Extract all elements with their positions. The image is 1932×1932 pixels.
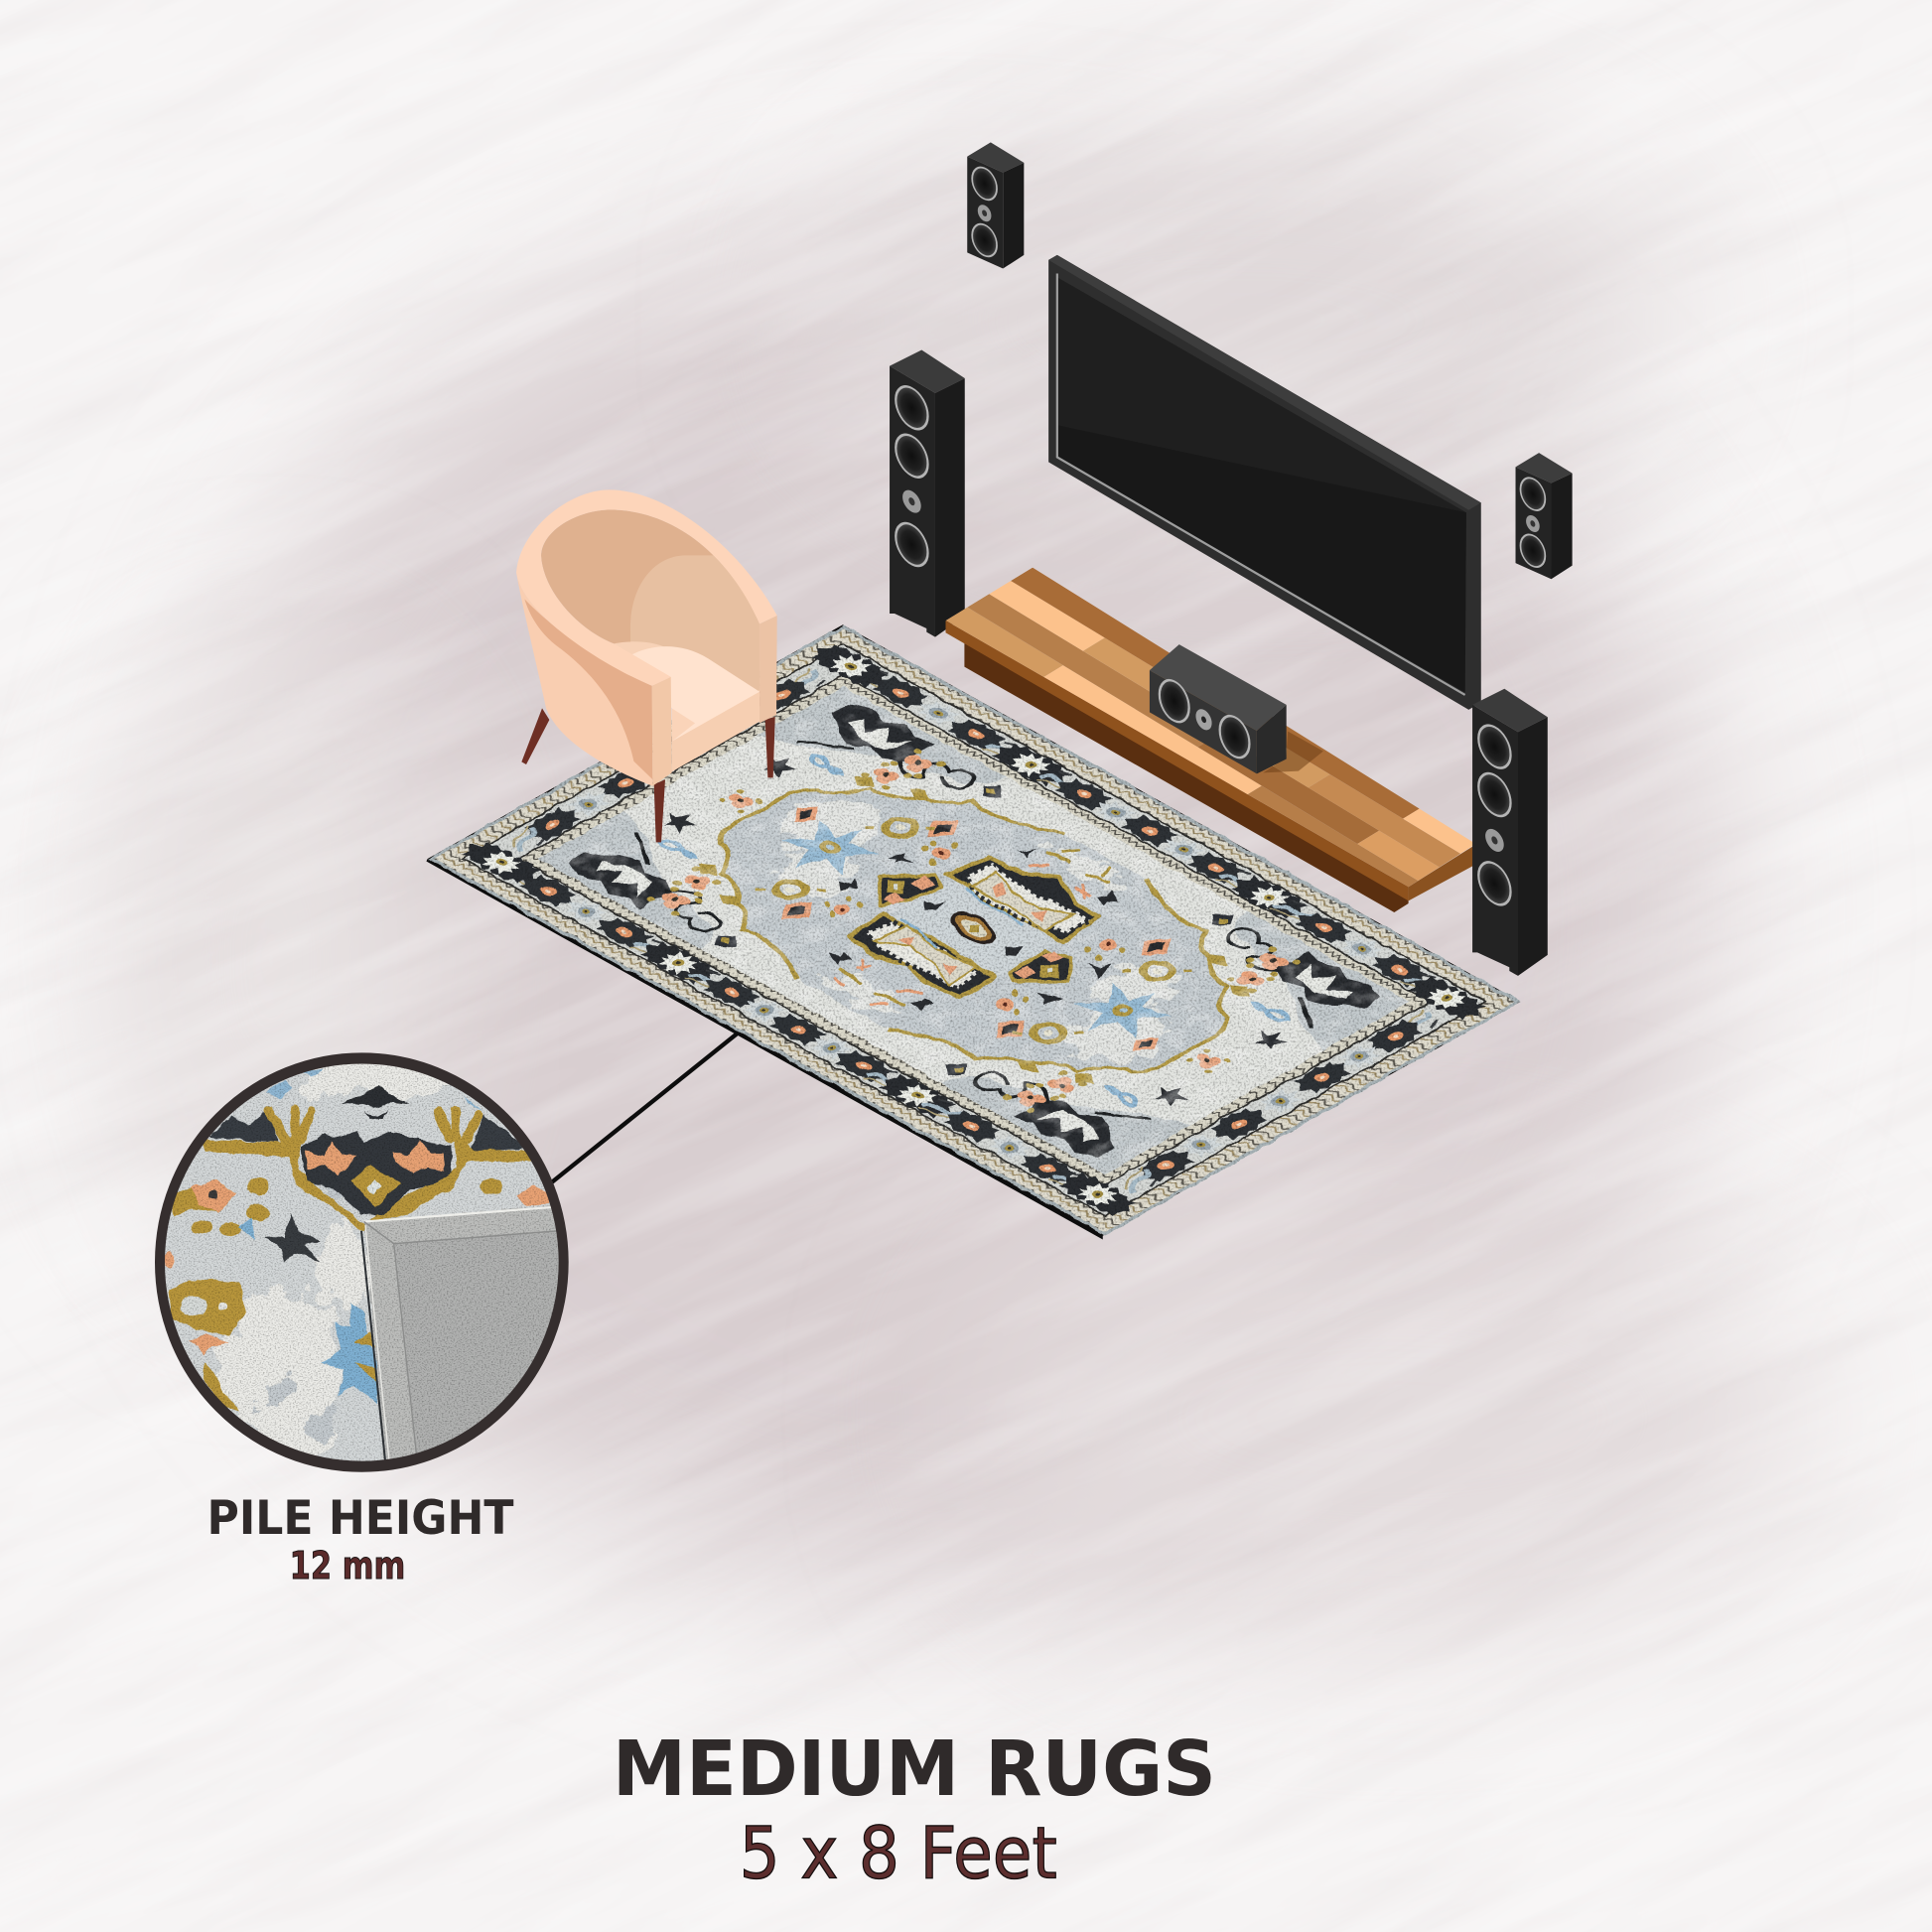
- rug drop edge: [426, 624, 1520, 1240]
- bottom-left dark panel: [850, 912, 995, 997]
- bird motifs around star: [829, 849, 1119, 1010]
- left-top side lobe: [880, 876, 941, 905]
- dark bird: [264, 1212, 321, 1262]
- chair right panel: [759, 616, 777, 723]
- dark border triangles: [210, 1112, 280, 1143]
- rug inner zigzag band: [518, 675, 1430, 1185]
- console wood planks: [945, 565, 1518, 912]
- speaker: right surround: [1516, 453, 1573, 579]
- console right end: [1409, 845, 1475, 900]
- rug motif band base: [463, 644, 1485, 1216]
- blue lobe flowers: [762, 812, 1186, 1048]
- television: [1048, 255, 1481, 710]
- media console: [945, 565, 1518, 912]
- tv screen: [1057, 277, 1466, 692]
- chair back highlight: [630, 555, 759, 692]
- medallion centre ground: [891, 874, 1072, 986]
- medallion gold outline: [627, 737, 1320, 1124]
- fold seams: [361, 1207, 559, 1465]
- chair front arm post: [652, 677, 672, 786]
- rug flat layout: [428, 624, 1520, 1236]
- chair rim: [516, 489, 777, 686]
- speaker: centre channel: [1150, 644, 1287, 773]
- tv top edge: [1048, 255, 1481, 510]
- right side gold and peach: [481, 1178, 502, 1194]
- chair side crescent: [524, 599, 652, 779]
- chair seat cushion: [630, 646, 759, 742]
- chair inner back: [541, 509, 759, 692]
- leader line from rug to magnified detail: [550, 1034, 737, 1184]
- speaker: left floor tower: [890, 349, 965, 637]
- rug zigzag outer border: [434, 628, 1514, 1232]
- chair rear cushion: [614, 641, 668, 657]
- left flowers: [174, 1179, 235, 1216]
- peach and gold flowers: [824, 841, 1125, 1016]
- pale mottling: [218, 1054, 454, 1458]
- pile height label: [207, 1491, 514, 1588]
- tv bezel highlight: [1057, 274, 1465, 695]
- folded rug backing: [364, 1203, 573, 1477]
- medallion body: [627, 737, 1320, 1124]
- gold ring flower: [169, 1279, 246, 1335]
- folded backing centre: [394, 1230, 573, 1477]
- rug central field: [538, 687, 1410, 1173]
- speaker: right floor tower: [1472, 689, 1548, 976]
- tv body: [1048, 255, 1481, 710]
- folded backing border: [364, 1203, 573, 1477]
- top-right pale panel: [966, 864, 1090, 932]
- gold and peach sprigs: [836, 851, 1109, 1005]
- peach flowers: [306, 1141, 357, 1175]
- gold diamond: [350, 1165, 400, 1207]
- armchair: [516, 489, 777, 842]
- top-right dark panel: [946, 858, 1098, 942]
- blue accents: [900, 889, 1023, 948]
- mottled wool highlights: [538, 687, 1410, 1173]
- top-right ornament: [971, 872, 1073, 930]
- ornament peach details: [898, 882, 1047, 975]
- top bird motif: [343, 1086, 409, 1120]
- pile height value: 12 mm: [290, 1544, 405, 1588]
- title: MEDIUM RUGS: [613, 1725, 1216, 1814]
- subtitle: size: 5 x 8 Feet: [740, 1811, 1057, 1894]
- bottom-left pale panel: [866, 921, 980, 990]
- centre oval: [946, 905, 1002, 951]
- tv screen reflection: [1057, 425, 1466, 692]
- side lobe details: [884, 876, 1064, 980]
- speaker: top surround: [967, 142, 1024, 269]
- rug: 5 x 8 isometric medallion rug: [428, 624, 1520, 1236]
- shadow of centre speaker: [1263, 732, 1323, 772]
- pile height label: PILE HEIGHT: [207, 1491, 514, 1546]
- bottom-left ornament: [874, 925, 977, 985]
- dark ornament: [301, 1131, 452, 1216]
- rug outer edge: [428, 624, 1520, 1236]
- gold corner shard: [202, 1363, 238, 1411]
- chair front apron: [672, 690, 759, 771]
- medallion pale blotches: [654, 752, 1294, 1109]
- magnifier: pile detail with folded rug corner: [152, 1047, 573, 1477]
- gold outline band: [202, 1121, 533, 1233]
- small field motifs: [581, 711, 1368, 1151]
- gold antlers: [270, 1110, 479, 1143]
- console lower plinth: [964, 642, 1409, 912]
- centre medallion: [824, 841, 1125, 1016]
- corner spandrels: [538, 687, 1410, 1173]
- console front face: [945, 621, 1409, 900]
- blue star: [323, 1303, 377, 1404]
- magnifier ring: [160, 1058, 564, 1466]
- chair seat lower left: [672, 708, 695, 742]
- grey mottling: [252, 1187, 344, 1446]
- wool face: [165, 1069, 550, 1461]
- chair legs: [521, 708, 775, 842]
- chair outer side: [516, 573, 652, 786]
- right-bottom side lobe: [1010, 951, 1070, 981]
- border motifs: [453, 638, 1495, 1222]
